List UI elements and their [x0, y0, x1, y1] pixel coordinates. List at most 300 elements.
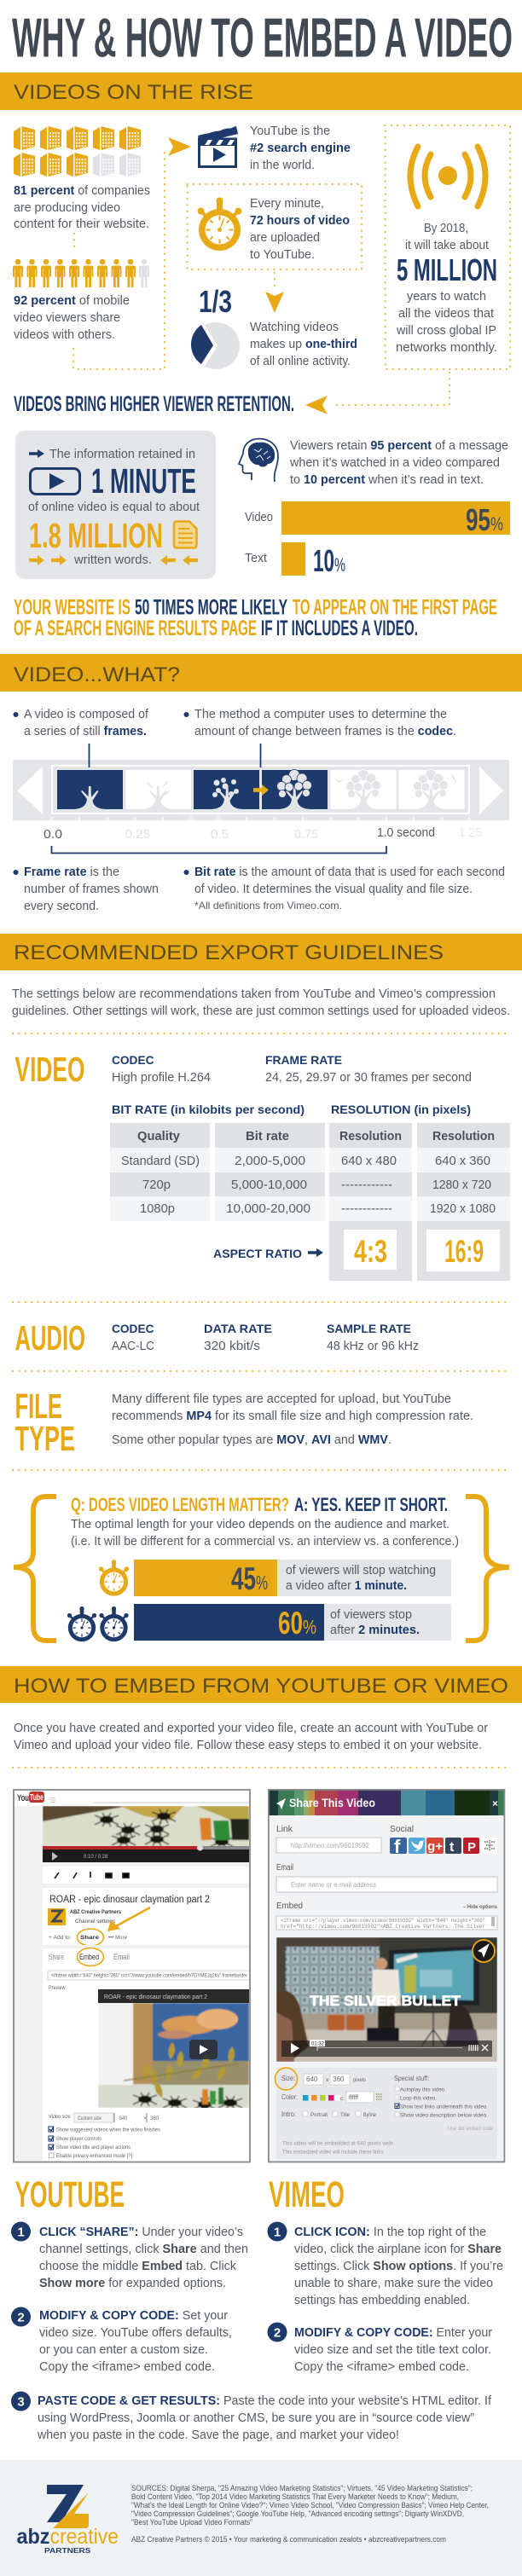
- channel row: Channel settings: [75, 1919, 115, 1925]
- panel: file type: [15, 1386, 473, 1458]
- share row: ••• More: [108, 1935, 127, 1941]
- arrow: codec change: [253, 784, 269, 796]
- audio sample rate: [327, 1322, 419, 1353]
- text: 72 hours: 72 hours of video: [250, 214, 350, 228]
- icon: two stopwatches: [67, 1606, 130, 1641]
- text: file types: Some other popular types are MOV, AVI and WMV.: [112, 1433, 392, 1447]
- step 1 badge: 1: [17, 2226, 25, 2239]
- video title overlay: THE SILVER BULLET: [310, 1993, 461, 2009]
- link field: Link: [276, 1825, 293, 1834]
- step 1 text: [39, 2226, 248, 2290]
- tabs: Embed: [79, 1953, 99, 1961]
- email field: Enter name or e-mail address: [291, 1881, 376, 1889]
- link field: http://vimeo.com/96019592: [291, 1842, 370, 1850]
- diagram: filmstrip timeline: [13, 744, 509, 853]
- heading: file type: TYPE: [15, 1419, 75, 1458]
- arrows and written words: [29, 553, 198, 567]
- step 3 badge: [11, 2391, 31, 2411]
- callout: 50 times more likely: OF A SEARCH ENGINE RESULTS PAGE: [14, 617, 257, 640]
- time labels: 0.0: [44, 828, 62, 842]
- panel: 5 million years: [386, 125, 510, 369]
- step 3: [11, 2391, 492, 2442]
- arrow: dotted down: [265, 273, 284, 313]
- aspect ratio: ASPECT RATIO: [213, 1247, 302, 1260]
- heading: file type: [15, 1386, 75, 1458]
- text: guidelines intro: guidelines. Other settings will work, these are just common settings used for uploaded videos.: [12, 1004, 510, 1018]
- definition: frames: a series of still frames.: [24, 725, 147, 738]
- channel row: [48, 1908, 122, 1925]
- embed field: Embed: [276, 1902, 303, 1911]
- aspect ratio: 4:3: [354, 1234, 387, 1269]
- bar: text 10 percent: %: [334, 554, 345, 576]
- bar: text 10 percent: 10: [313, 543, 334, 578]
- time labels: [44, 826, 482, 842]
- section band: export guidelines: [0, 934, 522, 970]
- section band: how to embed: HOW TO EMBED FROM YOUTUBE OR VIMEO: [14, 1675, 508, 1698]
- time labels: 1.25: [459, 826, 482, 840]
- iframe code input: <iframe width="640" height="360" src="//www.youtube.com/embed/h7GYMEJq2ks" frameborder: [51, 1973, 248, 1978]
- table: bit rate and resolution: 1080p: [140, 1202, 175, 1216]
- text: one-third: Watching videos: [250, 321, 339, 334]
- panel: 1 minute equals 1.8 million words: [15, 431, 216, 579]
- step 2 text: Copy the <iframe> embed code.: [39, 2360, 215, 2374]
- text: viewers retain: Viewers retain 95 percent of a message: [290, 439, 508, 453]
- audio sample rate: 48 kHz or 96 kHz: [327, 1340, 419, 1353]
- text: one-third: [250, 321, 357, 368]
- share banner: [268, 1789, 505, 1815]
- arrow: strip left: [17, 767, 43, 814]
- step 1 text: CLICK “SHARE”: Under your video’s: [39, 2226, 243, 2239]
- step 2 badge: 2: [17, 2311, 25, 2324]
- panel: video length: [14, 1494, 509, 1641]
- options panel: Intro:: [281, 2110, 296, 2118]
- social buttons: f: [394, 1836, 401, 1857]
- icon: broadcast: [410, 147, 485, 206]
- codec: [112, 1053, 211, 1085]
- option checkboxes: Enable privacy-enhanced mode [?]: [56, 2153, 132, 2159]
- options panel: Title: [340, 2112, 350, 2118]
- panel: audio settings: [15, 1318, 419, 1357]
- audio data rate: [204, 1322, 272, 1353]
- text: file types: [112, 1392, 473, 1447]
- section band: how to embed: [0, 1666, 522, 1703]
- embed field: href="http://vimeo.com/96019592">ABZ Creative Partners: The Silver: [281, 1924, 485, 1930]
- step 1 text: choose the middle Embed tab. Click: [39, 2260, 237, 2273]
- audio codec: [112, 1322, 154, 1353]
- social buttons: P: [467, 1840, 476, 1855]
- bar chart: retention: [245, 501, 510, 578]
- codec: CODEC: [112, 1053, 154, 1067]
- time labels: 0.5: [211, 828, 229, 842]
- text: embed intro: Once you have created and exported your video file, create an account with YouTube or: [14, 1722, 488, 1735]
- Vimeo video still: [276, 1937, 497, 2062]
- text: 72 hours: Every minute,: [250, 197, 324, 211]
- frame rate: 24, 25, 29.97 or 30 frames per second: [265, 1071, 472, 1085]
- options panel: Show text links underneath this video.: [400, 2104, 488, 2110]
- embed field: <iframe src="//player.vimeo.com/video/96019592" width="640" height="360": [281, 1918, 485, 1924]
- options panel: pixels: [353, 2077, 367, 2083]
- label: 1/3: 1/3: [199, 284, 232, 319]
- table: bit rate and resolution: Bit rate: [246, 1130, 289, 1143]
- table headings: [112, 1103, 471, 1116]
- section band: export guidelines: RECOMMENDED EXPORT GUIDELINES: [14, 941, 444, 964]
- bar: 45 percent: of viewers will stop watching: [286, 1564, 436, 1577]
- definition: bit rate: *All definitions from Vimeo.com.: [194, 900, 342, 912]
- text: by 2018: [405, 222, 489, 252]
- panel: Vimeo screenshot: [268, 1789, 505, 2162]
- options panel: Size:: [281, 2075, 295, 2082]
- text: search engine: YouTube is the: [250, 124, 330, 138]
- frame rate: FRAME RATE: [265, 1053, 342, 1067]
- footer: [0, 2460, 522, 2576]
- icon: head with brain: [239, 438, 278, 482]
- step 3 text: [37, 2394, 492, 2442]
- video size row: [49, 2113, 159, 2122]
- one second bracket: [51, 846, 386, 853]
- video size row: 640: [119, 2116, 127, 2122]
- email field: [276, 1863, 497, 1892]
- video size row: ×: [143, 2116, 147, 2122]
- text: search engine: #2 search engine: [250, 142, 351, 155]
- text: file types: Many different file types are accepted for upload, but YouTube: [112, 1392, 451, 1406]
- heading: file type: FILE: [15, 1386, 62, 1426]
- table: bit rate and resolution: ------------: [341, 1202, 392, 1216]
- YouTube logo: You: [17, 1793, 29, 1803]
- text: 92 percent: video viewers share: [14, 311, 120, 325]
- video size row: 360: [150, 2116, 159, 2122]
- text: 81 percent: are producing video: [14, 201, 120, 215]
- tabs: Email: [113, 1953, 130, 1961]
- step 1 text: settings. Click Show options. If you’re: [294, 2260, 503, 2273]
- frame 6: [399, 769, 464, 809]
- options panel: c:: [340, 2096, 345, 2102]
- video title: ROAR - epic dinosaur claymation part 2: [49, 1895, 210, 1905]
- link field: [276, 1825, 381, 1853]
- text: 81 percent: 81 percent of companies: [14, 184, 150, 198]
- share banner: ×: [492, 1797, 498, 1809]
- text: search engine: in the world.: [250, 159, 315, 172]
- arrow: strip right: [479, 767, 503, 814]
- table: bit rate and resolution: 2,000-5,000: [235, 1155, 305, 1168]
- tabs: Share: [49, 1953, 64, 1961]
- table: bit rate and resolution: 640 x 480: [341, 1155, 397, 1168]
- iframe code input: Preview:: [49, 1985, 67, 1991]
- table: bit rate and resolution: Resolution: [339, 1130, 402, 1143]
- text: viewers retain: [289, 439, 508, 487]
- sources: [131, 2484, 489, 2527]
- heading: YouTube: YOUTUBE: [15, 2174, 125, 2215]
- text: guidelines intro: [12, 987, 510, 1018]
- embed preview still: ROAR - epic dinosaur claymation part 2: [104, 1994, 207, 2000]
- text: of online video: of online video is equal to about: [28, 501, 200, 514]
- bar: video 95 percent: 95: [466, 502, 490, 537]
- sources: Bold Content Video, "Top 2014 Video Marketing Statistics That Every Marketer Needs to Know"; Medium,: [131, 2492, 459, 2502]
- social buttons: g+: [427, 1839, 443, 1854]
- frame 2: [126, 770, 191, 809]
- step 2 text: or you can enter a custom size.: [39, 2343, 208, 2357]
- step 1 badge: 1: [274, 2226, 281, 2239]
- options panel: Byline: [363, 2112, 376, 2118]
- step 2 badge: [11, 2307, 31, 2326]
- email field: Email: [276, 1863, 293, 1873]
- column: YouTube steps: [11, 2174, 248, 2374]
- table headings: BIT RATE (in kilobits per second): [112, 1103, 304, 1116]
- logo: abz creative partners: [17, 2485, 119, 2555]
- audio codec: AAC-LC: [112, 1340, 154, 1353]
- player controls: 01:32: [311, 2041, 325, 2046]
- table: bit rate and resolution: 10,000-20,000: [226, 1202, 310, 1216]
- table: bit rate and resolution: 1280 x 720: [432, 1178, 491, 1192]
- options panel: x: [326, 2077, 329, 2083]
- aspect ratio: 16:9: [444, 1234, 484, 1269]
- step 2 text: [39, 2309, 232, 2374]
- number: 1.8 million: 1.8 MILLION: [29, 516, 163, 555]
- audio codec: CODEC: [112, 1322, 154, 1335]
- sources: SOURCES: Digital Sherpa, "25 Amazing Video Marketing Statistics"; Virtuets, "45 Video Marketing Statistics";: [131, 2484, 473, 2493]
- text: years to watch: networks monthly.: [396, 341, 497, 355]
- frame 5: [331, 769, 396, 809]
- YouTube logo: Tube: [30, 1793, 44, 1803]
- table: bit rate and resolution: Resolution: [432, 1130, 495, 1143]
- callout: 50 times more likely: [14, 595, 497, 640]
- table: bit rate and resolution: 1920 x 1080: [430, 1202, 496, 1216]
- table: bit rate and resolution: [110, 1123, 510, 1221]
- definition: frame rate: number of frames shown: [24, 883, 159, 896]
- panel: 72 hours per minute: [188, 184, 362, 269]
- aspect ratio: [213, 1221, 510, 1281]
- bar: 60 percent: after 2 minutes.: [330, 1624, 420, 1637]
- player controls: [281, 2040, 492, 2057]
- heading: does length matter: A: YES. KEEP IT SHORT.: [294, 1494, 448, 1515]
- codec pointer line: [259, 744, 261, 767]
- panel: mobile viewers share: [13, 259, 149, 342]
- text: 72 hours: are uploaded: [250, 231, 320, 245]
- option checkboxes: Show suggested videos when the video finishes: [56, 2127, 161, 2133]
- video player still: [43, 1806, 249, 1862]
- definition: codec: [184, 708, 456, 738]
- social buttons: Social: [390, 1825, 414, 1834]
- step 3 text: when you paste in the code. Save the page, and market your video!: [37, 2428, 399, 2442]
- definition: bit rate: Bit rate is the amount of data that is used for each second: [194, 865, 505, 879]
- video size row: Video size:: [49, 2114, 72, 2120]
- step 1 text: CLICK ICON: In the top right of the: [294, 2226, 486, 2239]
- definition: frames: [14, 708, 149, 738]
- text: years to watch: will cross global IP: [396, 324, 496, 338]
- column: Vimeo steps: [268, 2174, 503, 2374]
- step 2 badge: 2: [274, 2326, 281, 2340]
- icon: one stopwatch: [98, 1560, 130, 1596]
- heading: video: VIDEO: [15, 1050, 85, 1089]
- icon: film clapper: [198, 126, 238, 167]
- table headings: RESOLUTION (in pixels): [331, 1103, 471, 1116]
- step 2 text: video size and set the title text color.: [294, 2343, 491, 2357]
- bar: 60 percent: %: [303, 1616, 316, 1638]
- share row: + Add to: [49, 1935, 70, 1941]
- text: information retained: The information retained in: [49, 448, 195, 461]
- step 2 text: [294, 2326, 492, 2374]
- bar: text 10 percent: [245, 542, 345, 578]
- text: one-third: of all online activity.: [250, 355, 351, 368]
- time labels: 1.0 second: [377, 826, 435, 840]
- text: years to watch: all the videos that: [398, 307, 494, 321]
- callout: 50 times more likely: 50 TIMES MORE LIKELY: [135, 595, 287, 619]
- icon: play button: [31, 469, 80, 495]
- definition: bit rate: [184, 865, 505, 912]
- arrow: dotted to retention heading: [305, 373, 450, 414]
- right brace: [466, 1496, 509, 1641]
- step 1 text: Show more for expanded options.: [39, 2277, 226, 2290]
- definition: frame rate: [14, 865, 159, 913]
- audio sample rate: SAMPLE RATE: [327, 1322, 411, 1335]
- table: bit rate and resolution: 640 x 360: [435, 1155, 490, 1168]
- callout: 50 times more likely: YOUR WEBSITE IS: [14, 595, 130, 619]
- icon: arrow: [29, 449, 44, 458]
- text: optimal length: (i.e. It will be different for a commercial vs. an interview vs. a conference.): [71, 1535, 459, 1548]
- text: optimal length: The optimal length for your video depends on the audience and market.: [71, 1518, 450, 1531]
- options panel: 360: [333, 2075, 345, 2083]
- table: bit rate and resolution: ------------: [341, 1178, 392, 1192]
- frame rate: [265, 1053, 472, 1085]
- options panel: 640: [306, 2075, 318, 2083]
- option checkboxes: [49, 2127, 161, 2159]
- bar: 45 percent: %: [256, 1572, 268, 1594]
- definition: codec: The method a computer uses to determine the: [194, 708, 447, 721]
- social buttons: [390, 1825, 497, 1857]
- embed field: – Hide options: [463, 1905, 498, 1910]
- arrow: gold pointer to share: [107, 1907, 150, 1931]
- audio data rate: DATA RATE: [204, 1322, 272, 1335]
- video size row: Custom size: [78, 2116, 102, 2122]
- table: bit rate and resolution: Standard (SD): [121, 1155, 200, 1168]
- bar: text 10 percent: Text: [245, 552, 267, 565]
- options panel: Loop this video.: [400, 2096, 437, 2101]
- callout: 50 times more likely: IF IT INCLUDES A VIDEO.: [261, 617, 418, 640]
- codec: High profile H.264: [112, 1071, 211, 1085]
- panel: one-third of online activity: [191, 284, 357, 369]
- bar: 60 percent: of viewers stop: [330, 1608, 412, 1622]
- text: viewers retain: to 10 percent when it’s read in text.: [290, 473, 484, 487]
- step 1 badge: [268, 2222, 287, 2241]
- bar: video 95 percent: Video: [245, 511, 273, 524]
- text: 81 percent: [14, 184, 150, 231]
- text: by 2018: By 2018,: [424, 222, 468, 235]
- text: by 2018: it will take about: [405, 239, 489, 252]
- heading: does length matter: Q: DOES VIDEO LENGTH MATTER?: [71, 1494, 289, 1515]
- share row: Share: [80, 1935, 99, 1941]
- share row: [49, 1929, 127, 1946]
- definition: frames: A video is composed of: [24, 708, 149, 721]
- time labels: 0.25: [125, 828, 150, 842]
- text: 72 hours: [250, 197, 350, 262]
- logo: abz creative partners: PARTNERS: [44, 2547, 91, 2555]
- options panel: [275, 2068, 497, 2159]
- definition: bit rate: of video. It determines the visual quality and file size.: [194, 883, 473, 896]
- logo: abz creative partners: abz: [17, 2525, 49, 2549]
- definition: frame rate: Frame rate is the: [24, 865, 119, 879]
- left brace: [14, 1496, 56, 1641]
- step 1 text: video, click the airplane icon for Share: [294, 2243, 502, 2256]
- icon: building grid, 8 of 10 filled: [14, 126, 141, 177]
- share banner: Share This Video: [289, 1796, 375, 1809]
- credit line: ABZ Creative Partners © 2015 • Your marketing & communication zealots • abzcreativepartners.com: [131, 2535, 446, 2544]
- sources: "Best YouTube Upload Video Formats": [131, 2518, 252, 2527]
- step 3 badge: 3: [17, 2394, 25, 2410]
- frame 4: [262, 769, 328, 809]
- social buttons: t: [450, 1840, 455, 1855]
- heading: audio: AUDIO: [15, 1318, 85, 1357]
- bar: 45 percent: [134, 1560, 451, 1596]
- step 1 badge: [11, 2222, 31, 2241]
- icon: document: [174, 522, 196, 547]
- bar: video 95 percent: %: [490, 513, 503, 535]
- definition: frame rate: every second.: [24, 900, 99, 913]
- options panel: Special stuff:: [394, 2075, 429, 2082]
- options panel: ffffff: [349, 2095, 358, 2101]
- options panel: Portrait: [310, 2112, 328, 2118]
- arrow: dotted connector to YouTube: [73, 137, 191, 369]
- section band: videos on the rise: VIDEOS ON THE RISE: [14, 81, 253, 104]
- frame rate pointer line: [89, 744, 90, 767]
- panel: YouTube screenshot: [14, 1790, 250, 2162]
- text: embed intro: [14, 1722, 488, 1752]
- icon: people row, 9 of 10 filled: [13, 259, 149, 287]
- text: years to watch: [396, 290, 497, 355]
- bar: 45 percent: a video after 1 minute.: [286, 1579, 407, 1593]
- embed preview still: [98, 1989, 249, 2111]
- YouTube logo: [17, 1792, 44, 1803]
- text: one-third: makes up one-third: [250, 338, 357, 351]
- text: 92 percent: videos with others.: [14, 328, 115, 342]
- text: 92 percent: 92 percent of mobile: [14, 294, 130, 308]
- editor toolbar: [43, 1867, 250, 1884]
- step 2 text: MODIFY & COPY CODE: Enter your: [294, 2326, 492, 2340]
- step 1 text: [294, 2226, 503, 2307]
- table: bit rate and resolution: Quality: [137, 1130, 180, 1143]
- frame 1: [57, 770, 123, 809]
- options panel: This video will be embedded at 640 pixels wide.: [282, 2140, 395, 2147]
- text: viewers retain: when it’s watched in a video compared: [289, 456, 500, 470]
- section band: video what: [0, 654, 522, 692]
- sources: "Video Compression Guidelines"; Google YouTube Help, "Advanced encoding settings"; Digiarty WinXDVD,: [131, 2509, 464, 2519]
- iframe code input: [48, 1971, 250, 1991]
- step 2 text: video size. YouTube offers defaults,: [39, 2326, 232, 2340]
- section band: video what: VIDEO...WHAT?: [14, 663, 180, 686]
- step 2 badge: [268, 2323, 287, 2342]
- options panel: Color:: [281, 2093, 298, 2101]
- tabs: [49, 1948, 130, 1966]
- time labels: 0.75: [294, 828, 318, 842]
- section band: videos on the rise: [0, 72, 522, 110]
- bar: video 95 percent: [245, 501, 510, 537]
- text: optimal length: [71, 1518, 459, 1548]
- step 3 text: using WordPress, Joomla or another CMS, be sure you are in “source code view”: [38, 2411, 474, 2425]
- number: 1 minute: 1 MINUTE: [91, 461, 196, 501]
- definition: codec: amount of change between frames is the codec.: [194, 725, 456, 738]
- bar: 45 percent: 45: [231, 1561, 256, 1596]
- option checkboxes: Show player controls: [56, 2136, 102, 2142]
- text: search engine: [250, 124, 351, 172]
- panel: video settings: [15, 1050, 510, 1281]
- channel row: ABZ Creative Partners: [70, 1910, 122, 1915]
- options panel: Show video description below video.: [400, 2113, 488, 2118]
- icon: airplane circled: [473, 1940, 495, 1962]
- text: embed intro: Vimeo and upload your video file. Follow these easy steps to embed it on your website.: [14, 1739, 482, 1752]
- options panel: Use old embed code: [448, 2126, 493, 2132]
- frame 3: [194, 770, 259, 809]
- arrows and written words: written words.: [73, 553, 152, 567]
- audio data rate: 320 kbit/s: [204, 1340, 260, 1353]
- heading: Vimeo: VIMEO: [269, 2174, 345, 2215]
